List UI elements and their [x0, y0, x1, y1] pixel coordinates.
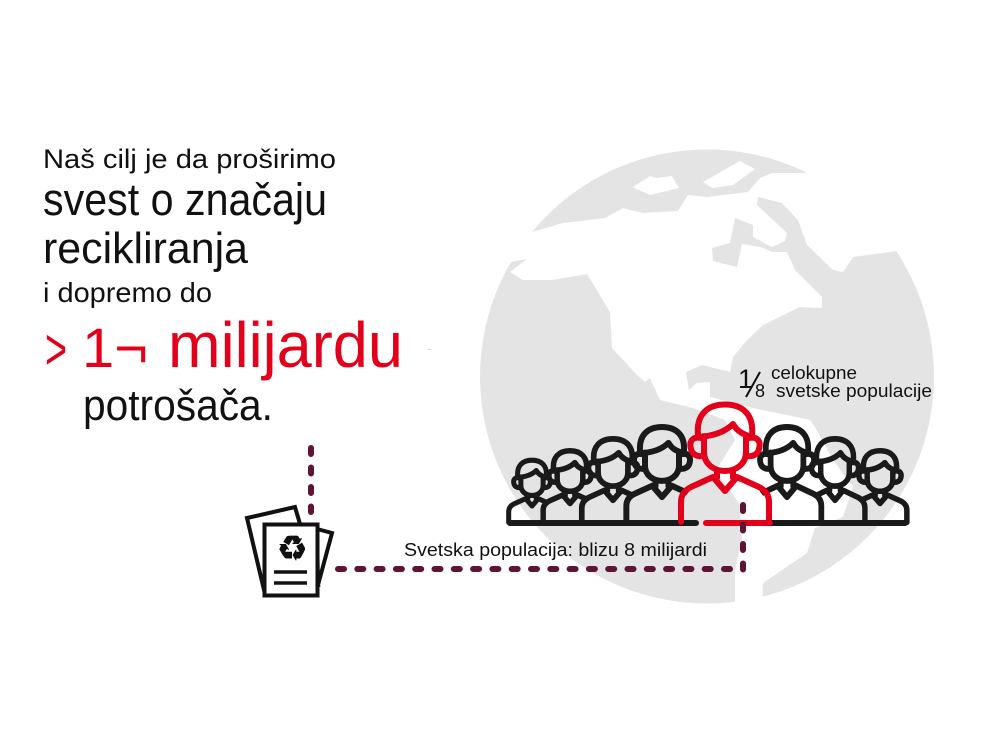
red figure: 1¬ — [82, 316, 148, 379]
callout: one eighth — [738, 363, 932, 401]
callout: one eighth: celokupne — [771, 363, 857, 383]
person 7 — [853, 451, 907, 522]
line: reach: i dopremo do — [43, 277, 212, 308]
ground line black — [510, 520, 905, 526]
callout: one eighth: 1 — [738, 364, 753, 394]
headline text — [43, 144, 403, 430]
highlighted red person — [681, 404, 770, 523]
person 3 — [582, 439, 644, 522]
person 1 — [509, 460, 555, 522]
person 6 — [805, 439, 865, 522]
dashed connector: icon to people — [338, 505, 743, 572]
callout: one eighth: 8 — [755, 381, 765, 401]
large line: recycling: recikliranja — [43, 224, 249, 273]
icon: recycling symbol: ♻ — [277, 529, 307, 569]
intro line: Naš cilj je da proširimo — [43, 144, 336, 174]
red figure — [45, 309, 403, 382]
person 2 — [543, 451, 597, 522]
globe illustration — [428, 150, 950, 610]
callout: one eighth: svetske populacije — [776, 381, 932, 401]
dashed connector: headline to icon — [308, 448, 314, 512]
icon: recycled paper sheets — [247, 507, 332, 596]
red figure: > — [45, 317, 67, 382]
person 5 — [753, 427, 821, 522]
large line: awareness: svest o značaju — [43, 174, 327, 225]
consumers line: potrošača. — [83, 381, 273, 430]
person 4 — [626, 427, 698, 522]
population label: Svetska populacija: blizu 8 milijardi — [404, 540, 707, 560]
red figure: milijardu — [168, 309, 403, 381]
people group — [509, 404, 907, 523]
